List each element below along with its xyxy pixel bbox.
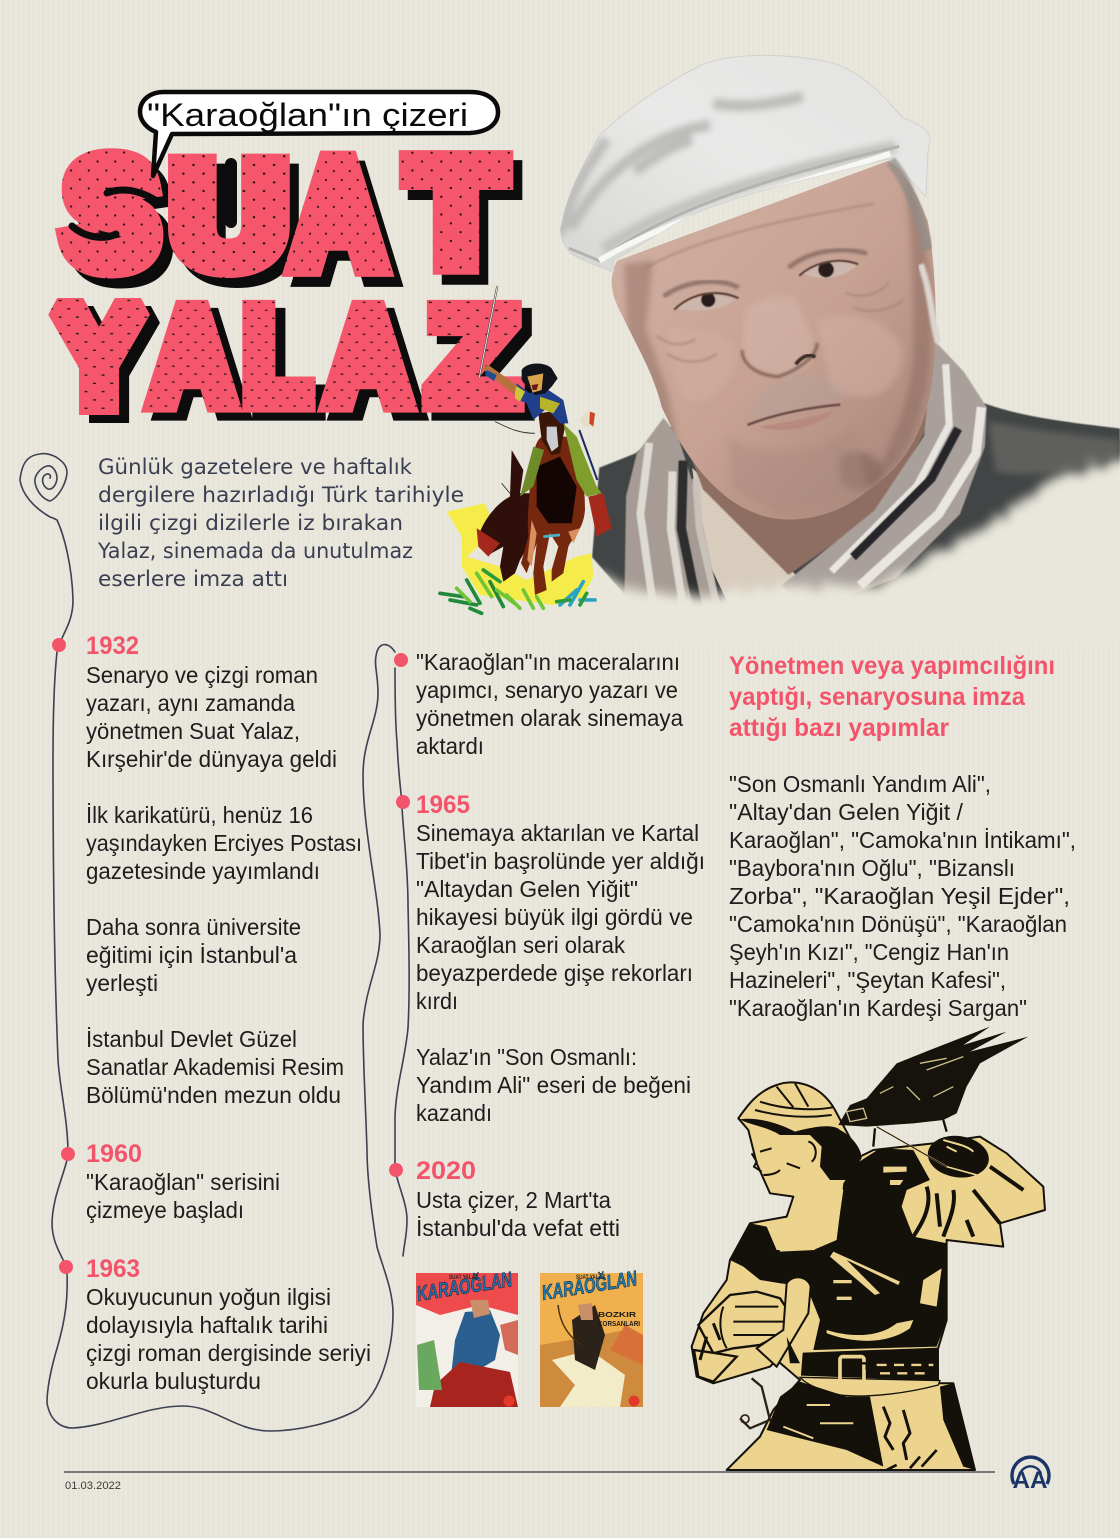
cuff [694, 1350, 737, 1382]
intro text: eserlere imza attı [98, 567, 288, 591]
face shading [624, 171, 931, 514]
title face letters: Y [55, 279, 143, 434]
timeline curve with spiral [20, 454, 409, 1431]
rider on horse illustration [440, 286, 612, 613]
comic cover: Karaoğlan issue 27: KORSANLARI [598, 1319, 640, 1328]
filmography list: "Karaoğlan'ın Kardeşi Sargan" [729, 995, 1027, 1021]
date: 01.03.2022 [65, 1480, 121, 1492]
raven [838, 1027, 1028, 1127]
belt buckle [840, 1357, 864, 1387]
face [612, 161, 936, 520]
comic cover: Karaoğlan issue 4: SUAT YALAZ [449, 1275, 478, 1281]
timeline entry: 1965: "Altaydan Gelen Yiğit" [416, 876, 638, 902]
hat creases [560, 96, 899, 261]
intro text [97, 455, 464, 591]
back horse [478, 450, 532, 582]
timeline dot: 1932 [52, 638, 66, 652]
timeline entry: 1965: kazandı [416, 1100, 492, 1126]
speech bubble subtitle [140, 92, 498, 176]
title shadow letters [74, 140, 512, 307]
filmography list [729, 771, 1076, 1021]
timeline entry: 1965: Sinemaya aktarılan ve Kartal [416, 820, 699, 846]
dagger pommel and cloth [757, 1277, 811, 1367]
timeline entry: 1965: Tibet'in başrolünde yer aldığı [416, 848, 705, 874]
title shadow letters: T [418, 140, 512, 304]
nose [742, 343, 817, 377]
timeline entry: 1965: Yandım Ali" eseri de beğeni [416, 1072, 691, 1098]
timeline dot: 1963 [59, 1260, 73, 1274]
title shadow letters: L [254, 290, 320, 438]
title shadow letters: U [180, 145, 296, 306]
timeline entry: 1965: 1965 [416, 791, 470, 819]
timeline entry: 1932: yerleşti [86, 970, 158, 996]
title face letters: U [171, 135, 287, 296]
coat [592, 404, 1120, 611]
shirt highlights [773, 1187, 843, 1252]
shirt [692, 468, 881, 611]
title face letters: S [64, 130, 158, 297]
timeline entry: 1932: Sanatlar Akademisi Resim [86, 1054, 344, 1080]
timeline entry: 2020: 2020 [416, 1157, 476, 1185]
horse head [538, 410, 565, 455]
timeline entry: 1932: Kırşehir'de dünyaya geldi [86, 746, 337, 772]
title shadow letters [65, 287, 527, 442]
title shadow letters: A [302, 141, 392, 307]
timeline entry: 1932: Senaryo ve çizgi roman [86, 662, 318, 688]
scarf left [624, 418, 721, 611]
sack ball [925, 1132, 992, 1181]
rider arm [482, 365, 517, 395]
title: YALAZ [55, 279, 527, 442]
yellow splash [447, 503, 593, 605]
front horse body [521, 437, 585, 595]
timeline dot: 2020 [389, 1163, 403, 1177]
timeline entry: 1963: çizgi roman dergisinde seriyi [86, 1340, 371, 1366]
clasped hands [698, 1292, 790, 1353]
timeline entry: 2020: İstanbul'da vefat etti [416, 1215, 620, 1241]
comic cover: Karaoğlan issue 4 [415, 1267, 518, 1407]
timeline dot: 1960 [61, 1147, 75, 1161]
comic cover: Karaoğlan issue 27: KARAOĞLAN [540, 1266, 639, 1305]
sword [479, 286, 497, 377]
timeline entry: 1965 [416, 791, 705, 1126]
timeline entry: 1932: İlk karikatürü, henüz 16 [86, 802, 313, 828]
filmography list: Hazineleri", "Şeytan Kafesi", [729, 967, 1006, 993]
timeline entry: 1965: hikayesi büyük ilgi gördü ve [416, 904, 693, 930]
timeline entry: 1965: kırdı [416, 988, 458, 1014]
timeline entry: 1932: yaşındayken Erciyes Postası [86, 830, 362, 856]
AA logo: AA [1012, 1467, 1048, 1494]
timeline dot: 1965 [396, 795, 410, 809]
timeline entry: 2020 [416, 1157, 620, 1241]
filmography list: Zorba", "Karaoğlan Yeşil Ejder", [729, 883, 1070, 909]
neck [678, 407, 939, 575]
timeline entry: 1963: dolayısıyla haftalık tarihi [86, 1312, 328, 1338]
eye left [664, 282, 739, 311]
timeline entry: 1963 [86, 1255, 371, 1394]
rider torso [515, 383, 568, 423]
filmography heading: Yönetmen veya yapımcılığını [729, 652, 1055, 680]
title face letters [64, 130, 503, 297]
AA logo [1012, 1457, 1049, 1494]
title shadow letters: A [161, 291, 243, 439]
intro text: dergilere hazırladığı Türk tarihiyle [98, 483, 464, 507]
timeline entry: 1932: 1932 [86, 632, 139, 660]
title shadow letters: S [74, 140, 168, 307]
comic cover: Karaoğlan issue 27: BOZKIR [598, 1310, 637, 1319]
filmography list: "Son Osmanlı Yandım Ali", [729, 771, 991, 797]
eye right [789, 250, 867, 278]
speech bubble subtitle: "Karaoğlan"ın çizeri [147, 97, 468, 133]
rider legs [563, 423, 602, 497]
timeline entry: 1963: Okuyucunun yoğun ilgisi [86, 1284, 331, 1310]
filmography list: Şeyh'ın Kızı", "Cengiz Han'ın [729, 939, 1009, 965]
title face letters: A [151, 283, 233, 431]
scarf right [781, 339, 987, 611]
grass [440, 570, 595, 613]
title face letters: T [409, 130, 503, 294]
figure base colour [692, 1082, 1045, 1470]
intro text: Yalaz, sinemada da unutulmaz [97, 539, 413, 563]
headband stripes [755, 1083, 833, 1117]
timeline entry: 1932: yazarı, aynı zamanda [86, 690, 295, 716]
timeline entry: 1932: Bölümü'nden mezun oldu [86, 1082, 341, 1108]
comic cover: Karaoğlan issue 27: SUAT YALAZ [576, 1275, 605, 1281]
timeline entry: 1965: Yalaz'ın "Son Osmanlı: [416, 1044, 637, 1070]
timeline entry: 1932: eğitimi için İstanbul'a [86, 942, 297, 968]
hair side [921, 264, 939, 343]
timeline entry: 1960: "Karaoğlan" serisini [86, 1169, 280, 1195]
raised sleeve folds [913, 1167, 1023, 1237]
title face letters: L [244, 282, 310, 430]
hair [740, 1119, 862, 1180]
intro text: ilgili çizgi dizilerle iz bırakan [98, 511, 403, 535]
filmography heading: yaptığı, senaryosuna imza [729, 683, 1026, 711]
title face letters: Z [429, 283, 517, 431]
comic cover: Karaoğlan issue 4: KARAOĞLAN [415, 1267, 514, 1306]
timeline entry: 1960 [86, 1140, 280, 1223]
timeline dot: Karaoğlan cinema [394, 653, 408, 667]
timeline entry: 1965: beyazperdede gişe rekorları [416, 960, 693, 986]
title shadow letters: Z [439, 291, 527, 439]
timeline entry: 1963: 1963 [86, 1255, 140, 1283]
title shadow letters: A [337, 291, 419, 439]
trousers black [767, 1382, 883, 1467]
title face letters: A [293, 131, 383, 297]
footer line [64, 1471, 995, 1473]
portrait photo of Suat Yalaz [539, 55, 1120, 643]
timeline entry: 1932: gazetesinde yayımlandı [86, 858, 320, 884]
hat [561, 55, 930, 272]
title shadow letters: Y [65, 287, 153, 442]
timeline entry: 1960: çizmeye başladı [86, 1197, 244, 1223]
filmography heading [729, 652, 1055, 742]
filmography list: "Baybora'nın Oğlu", "Bizanslı [729, 855, 1015, 881]
timeline entry: Karaoğlan on cinema: yapımcı, senaryo yazarı ve [416, 677, 678, 703]
timeline entry: 1932: yönetmen Suat Yalaz, [86, 718, 300, 744]
title: SUAT [64, 130, 512, 307]
intro text: Günlük gazetelere ve haftalık [98, 455, 413, 479]
letter slit shadows [72, 164, 231, 237]
comic character with raven illustration [692, 1027, 1045, 1470]
face lines [752, 1142, 816, 1175]
timeline entry: Karaoğlan on cinema [416, 649, 683, 759]
timeline entry: 1965: Karaoğlan seri olarak [416, 932, 625, 958]
filmography list: Karaoğlan", "Camoka'nın İntikamı", [729, 827, 1076, 853]
timeline entry: Karaoğlan on cinema: "Karaoğlan"ın maceralarını [416, 649, 680, 675]
belt [802, 1348, 938, 1380]
title face letters [55, 279, 517, 434]
tassel [580, 410, 595, 427]
sword hilt [740, 1378, 770, 1428]
comic cover: Karaoğlan issue 27 [540, 1266, 643, 1407]
rider head [522, 364, 558, 395]
timeline entry: Karaoğlan on cinema: aktardı [416, 733, 484, 759]
timeline entry: 1963: okurla buluşturdu [86, 1368, 261, 1394]
mouth [747, 405, 840, 430]
timeline entry: Karaoğlan on cinema: yönetmen olarak sinemaya [416, 705, 683, 731]
filmography list: "Camoka'nın Dönüşü", "Karaoğlan [729, 911, 1067, 937]
filmography heading: attığı bazı yapımlar [729, 714, 949, 742]
torso black [730, 1148, 947, 1350]
timeline entry: 1932: İstanbul Devlet Güzel [86, 1026, 297, 1052]
timeline entry: 1932: Daha sonra üniversite [86, 914, 301, 940]
filmography list: "Altay'dan Gelen Yiğit / [729, 799, 964, 825]
timeline entry: 2020: Usta çizer, 2 Mart'ta [416, 1187, 611, 1213]
timeline entry: 1960: 1960 [86, 1140, 142, 1168]
timeline entry: 1932 [86, 632, 362, 1108]
title face letters: A [327, 283, 409, 431]
pouch and zigzag [883, 1407, 910, 1460]
reins [495, 422, 535, 493]
fading torn edge [539, 454, 1120, 636]
